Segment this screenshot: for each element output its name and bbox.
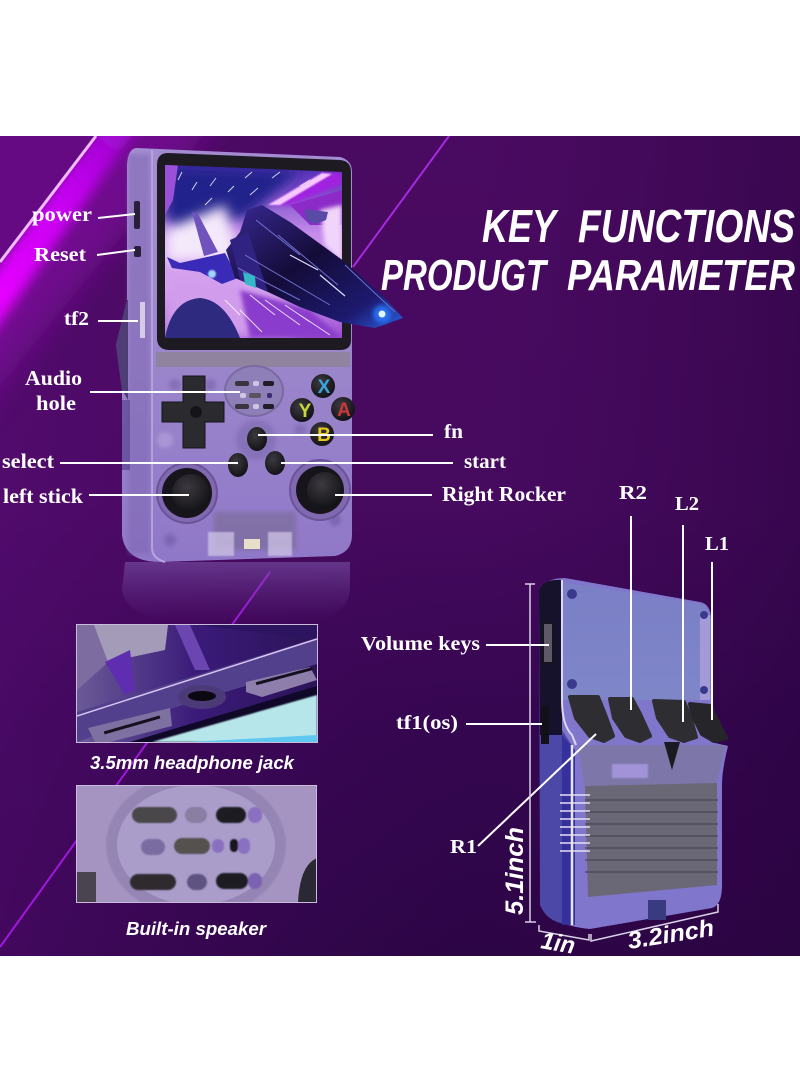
dimension: height: 5.1inch [501, 827, 529, 915]
label: R1 [450, 734, 596, 858]
label: select: select [2, 449, 54, 473]
photo: built-in speaker close-up [76, 785, 317, 903]
small buttons [247, 427, 267, 451]
dimension: depth: 1in [539, 927, 577, 960]
dimension: width [591, 904, 718, 955]
side buttons [542, 622, 554, 664]
internal soft details [157, 379, 341, 546]
spaceship [167, 205, 403, 328]
label: R1: R1 [450, 836, 477, 858]
face buttons [290, 374, 355, 446]
title: key functions: KEY [482, 200, 559, 252]
callouts: console front [2, 204, 566, 508]
dimension: width: 3.2inch [626, 915, 716, 955]
screen image [165, 165, 342, 338]
label: audio hole [25, 366, 240, 415]
face buttons: B [317, 425, 331, 446]
label: power [32, 204, 135, 226]
title: product parameter: PRODUGT [381, 251, 548, 300]
label: L1: L1 [705, 533, 729, 555]
title: key functions [482, 200, 795, 252]
label: left stick: left stick [3, 484, 83, 508]
label: audio hole: hole [36, 391, 76, 415]
label: power: power [32, 204, 92, 226]
label: fn: fn [444, 421, 463, 443]
label: right rocker: Right Rocker [442, 482, 566, 506]
illustration: handheld console front [116, 148, 403, 562]
label: audio hole: Audio [25, 366, 82, 390]
console body [116, 148, 352, 562]
label: tf1(os): tf1(os) [396, 712, 458, 734]
illustration: handheld console back [539, 578, 728, 929]
title: product parameter [381, 251, 795, 300]
joysticks [157, 463, 217, 523]
label: start: start [464, 451, 506, 473]
callouts: console back [361, 482, 729, 960]
d-pad [162, 376, 224, 448]
side buttons [134, 201, 140, 229]
label: tf2: tf2 [64, 308, 89, 330]
reflection under console [122, 562, 350, 620]
internals under triggers [578, 745, 726, 790]
label: reset: Reset [34, 244, 86, 266]
face buttons: A [337, 400, 351, 421]
photo: headphone jack close-up [76, 624, 318, 742]
face buttons: Y [299, 401, 312, 422]
screen bezel [157, 153, 351, 350]
back body [540, 578, 728, 929]
dimension: height [501, 584, 536, 922]
heatsink panel [585, 783, 717, 897]
label: L2: L2 [675, 493, 699, 515]
caption: headphone jack: 3.5mm headphone jack [90, 753, 295, 773]
panel: purple background [0, 90, 800, 956]
caption: built-in speaker: Built-in speaker [126, 919, 267, 939]
shoulder triggers [570, 697, 726, 741]
face buttons: X [318, 377, 331, 398]
label: R2: R2 [619, 482, 647, 504]
speaker grille [225, 366, 283, 416]
label: reset [34, 244, 135, 266]
bottom ports [214, 512, 296, 550]
label: volume keys: Volume keys [361, 633, 480, 655]
label: tf2 [64, 308, 138, 330]
